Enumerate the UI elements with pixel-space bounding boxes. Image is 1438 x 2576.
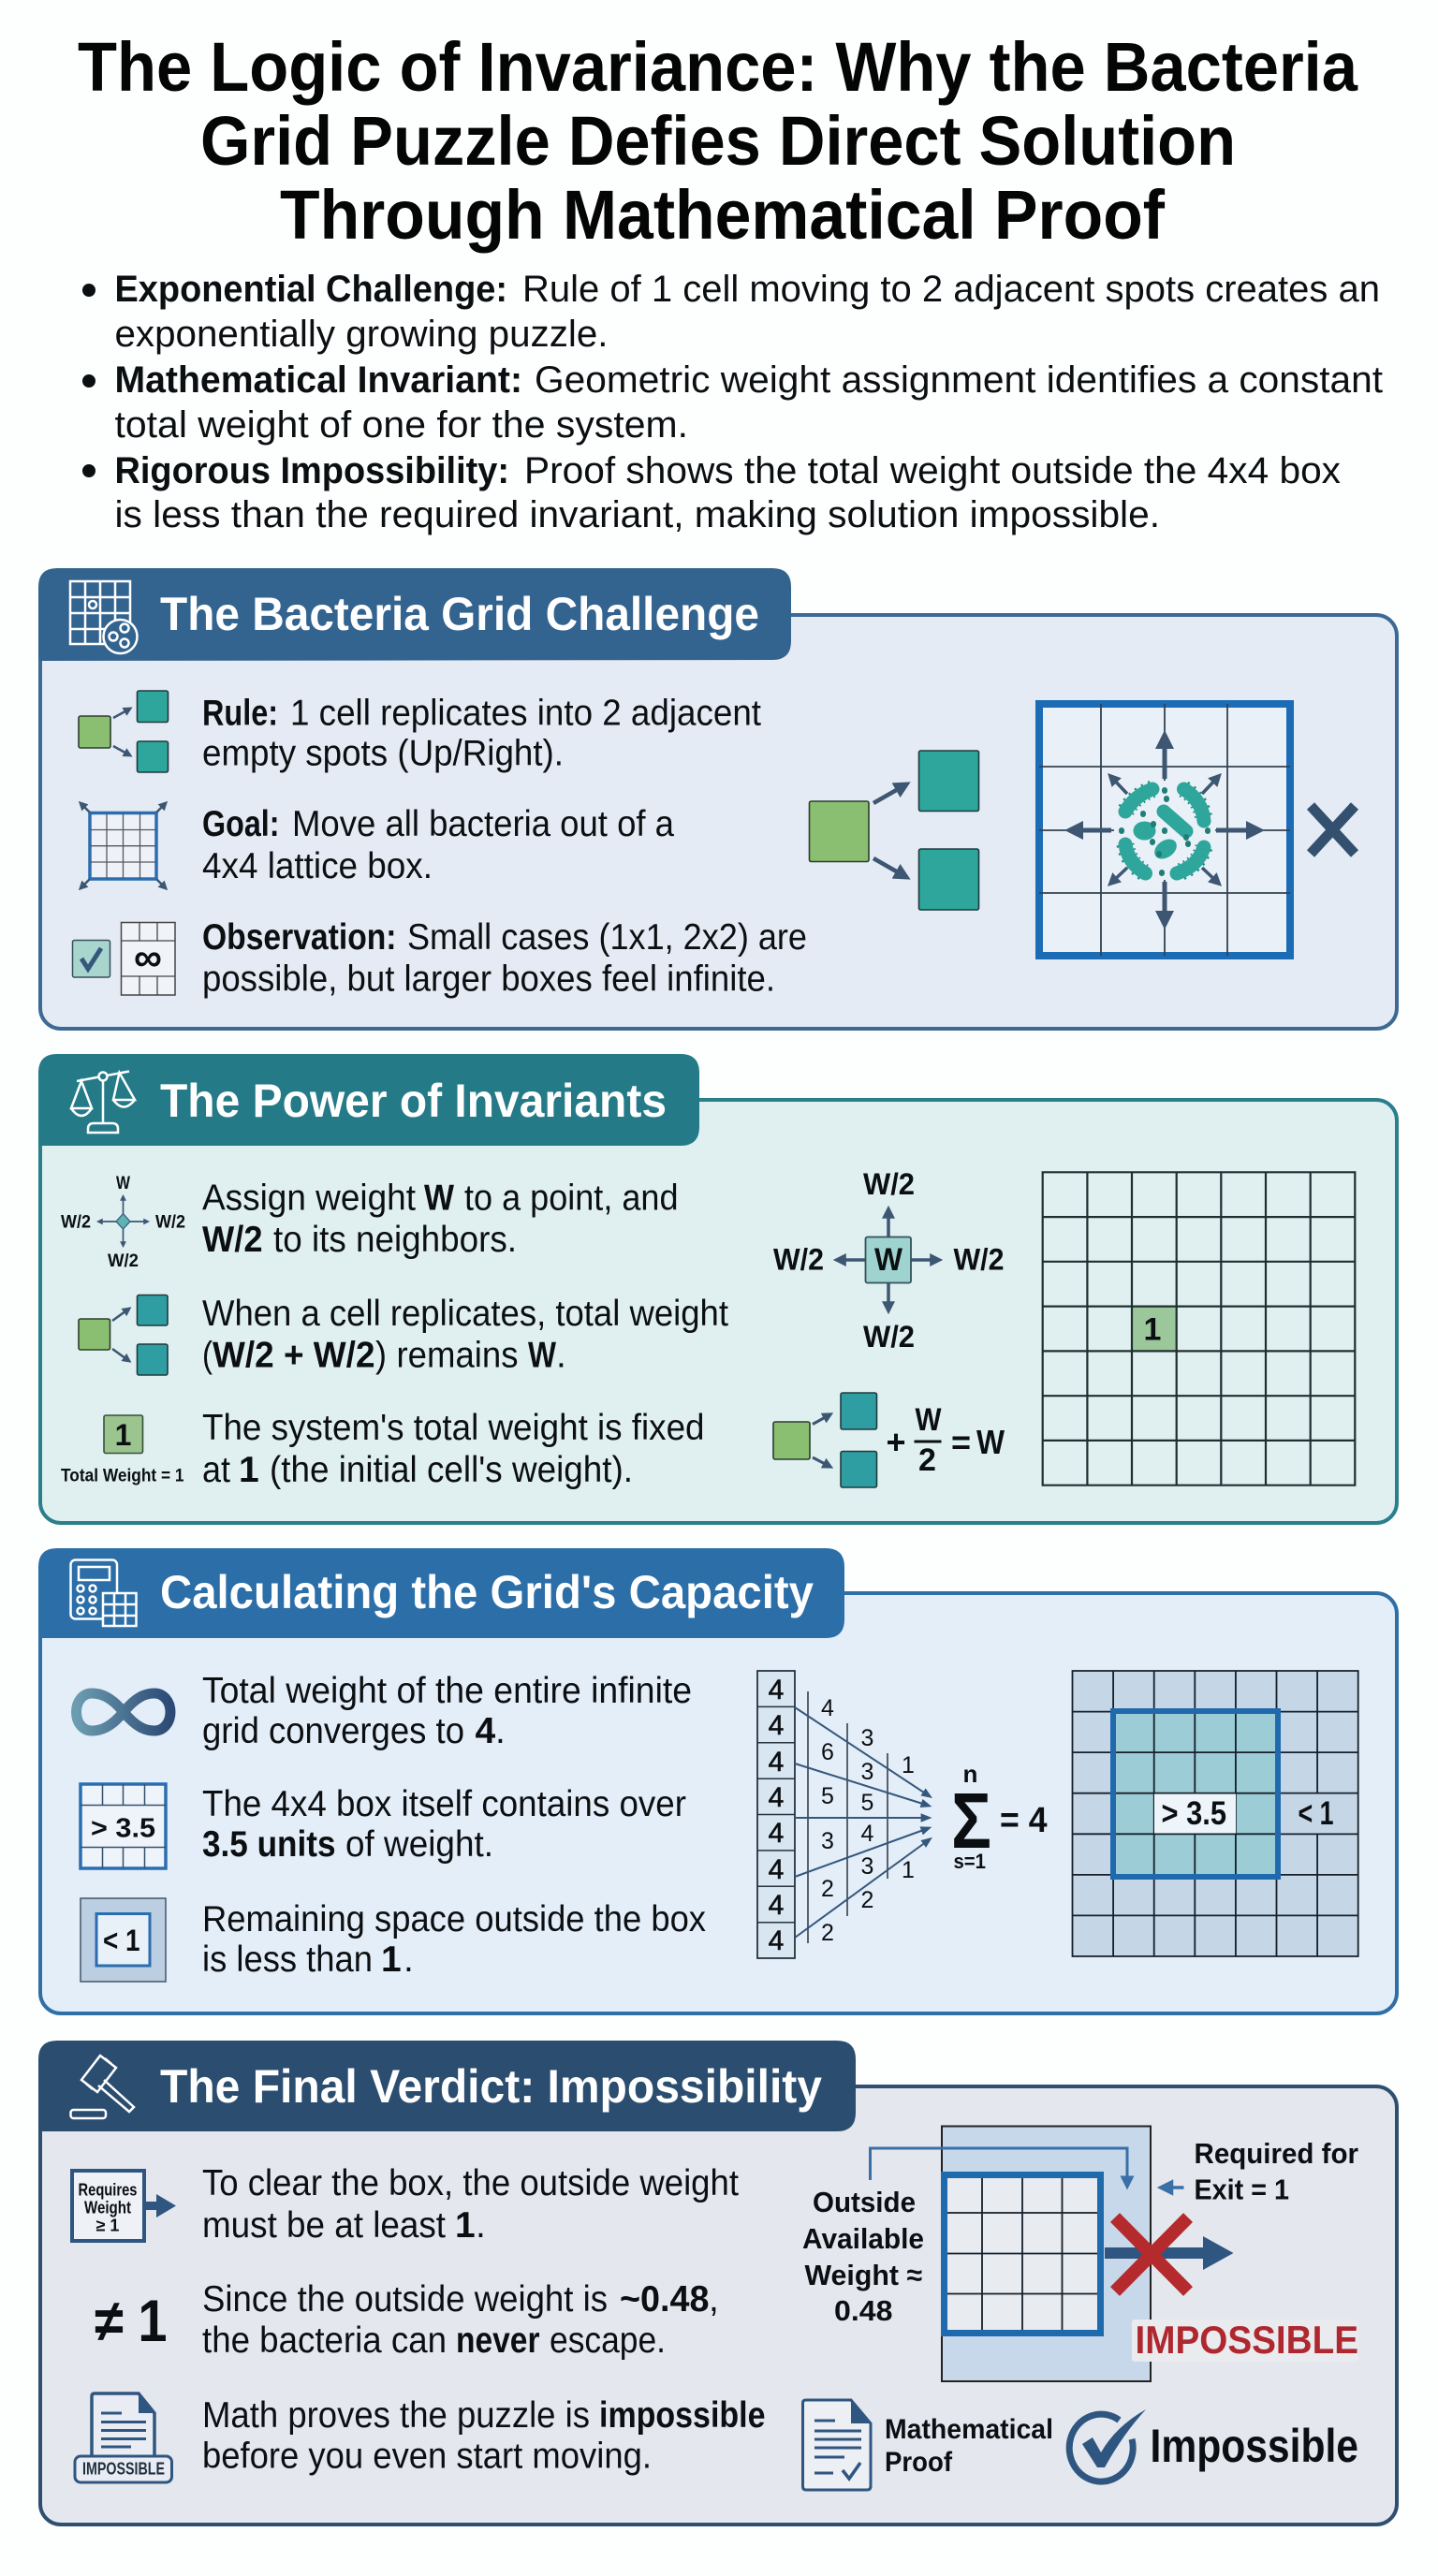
icon: box greater than 3.5 [81, 1784, 166, 1868]
diagram: convergence to 4: 4 [769, 1782, 784, 1813]
diagram: convergence to 4: 3 [861, 1759, 873, 1785]
diagram: convergence to 4: 4 [769, 1747, 784, 1778]
text: replication: W [528, 1335, 556, 1376]
text: observation [202, 917, 807, 1000]
text: box contents: The 4x4 box itself contains over [202, 1784, 686, 1824]
heading: The Final Verdict: Impossibility [160, 2060, 822, 2113]
heading: The Bacteria Grid Challenge [160, 588, 759, 640]
text: replication: When a cell replicates, total weight [202, 1294, 728, 1334]
text: outside weight: Since the outside weight is [202, 2279, 608, 2320]
text: requirement: To clear the box, the outside weight [202, 2163, 739, 2203]
summary bullets: Geometric weight assignment identifies a constant [535, 359, 1383, 401]
panel: the bacteria grid challenge [38, 568, 1397, 1029]
diagram: capacity grid [1073, 1671, 1358, 1956]
diagram: weight grid [1043, 1172, 1355, 1486]
diagram: convergence to 4: 2 [821, 1876, 834, 1902]
diagram: convergence to 4: 2 [861, 1887, 873, 1913]
diagram: convergence to 4: 3 [861, 1725, 873, 1751]
diagram: convergence to 4: 4 [769, 1854, 784, 1885]
text: assign weight: W [424, 1178, 454, 1219]
diagram: cell replicating [809, 751, 979, 910]
heading: The Power of Invariants [160, 1075, 667, 1127]
text: total weight: grid converges to [202, 1711, 464, 1751]
icon: cell replicating [79, 1295, 168, 1375]
icon: large cross [1311, 806, 1355, 854]
label: required for exit: Exit = 1 [1195, 2174, 1289, 2205]
summary bullets: Mathematical Invariant: [114, 359, 522, 401]
text: remaining space: is less than [202, 1939, 373, 1980]
label: outside available weight [802, 2186, 924, 2327]
diagram: bacteria in 4x4 box [1039, 704, 1290, 956]
icon: impossible document: IMPOSSIBLE [82, 2460, 165, 2479]
sum equals 4 [951, 1760, 1047, 1873]
diagram: convergence to 4: 3 [821, 1828, 834, 1854]
text: fixed total: at [202, 1450, 230, 1490]
diagram: convergence to 4: 2 [821, 1920, 834, 1946]
title [78, 28, 1358, 254]
heading: Calculating the Grid's Capacity [160, 1566, 814, 1618]
diagram: W with neighbours: W/2 [863, 1167, 915, 1201]
header tab: calculating the grid's capacity [38, 1548, 844, 1638]
text: remaining space [202, 1899, 706, 1980]
text: outside weight: ~0.48 [620, 2279, 710, 2320]
sum equals 4: s=1 [953, 1850, 986, 1873]
diagram: outside weight versus required [802, 2127, 1358, 2381]
icon: check circle [1069, 2409, 1146, 2481]
label: required for exit [1195, 2137, 1358, 2205]
text: box contents [202, 1784, 686, 1865]
panel: calculating the grid's capacity [38, 1548, 1397, 2013]
text: rule: empty spots (Up/Right). [202, 734, 564, 773]
text: fixed total: 1 [239, 1450, 259, 1490]
text: goal [202, 804, 674, 886]
text: requirement [202, 2163, 739, 2246]
text: requirement: 1 [455, 2205, 476, 2246]
text: observation: Observation: [202, 917, 397, 958]
title: The Logic of Invariance: Why the Bacteria [78, 28, 1358, 106]
icon: balance scale [71, 1071, 135, 1133]
text: total weight: 4 [476, 1711, 496, 1751]
text: outside weight: escape. [550, 2320, 666, 2361]
icon: gavel [71, 2056, 134, 2118]
diagram: replication equation: = [951, 1423, 971, 1461]
header tab: the final verdict [38, 2041, 856, 2131]
icon: proof document [803, 2400, 871, 2490]
sum equals 4: = 4 [1000, 1801, 1047, 1840]
text: rule: Rule: [202, 693, 278, 734]
diagram: convergence to 4: 5 [821, 1783, 834, 1809]
text: goal: Goal: [202, 804, 279, 844]
text: assign weight [202, 1178, 678, 1260]
text: replication: remains [397, 1335, 519, 1376]
diagram: convergence to 4: 4 [861, 1821, 874, 1847]
summary bullets: Proof shows the total weight outside the 4x4 box [524, 450, 1341, 491]
text: total weight: . [495, 1711, 506, 1751]
text: conclusion: Math proves the puzzle is [202, 2395, 590, 2436]
diagram: convergence to 4: 1 [902, 1752, 915, 1778]
diagram: convergence to 4: 5 [861, 1790, 873, 1816]
summary bullets: total weight of one for the system. [114, 404, 688, 446]
icon: requires weight box: ≥ 1 [96, 2217, 119, 2235]
diagram: W with neighbours: W/2 [863, 1320, 915, 1354]
label: mathematical proof: Mathematical [885, 2414, 1053, 2445]
text: conclusion: before you even start moving. [202, 2436, 652, 2477]
diagram: convergence to 4 [757, 1671, 1047, 1958]
panel: the final verdict [38, 2041, 1397, 2525]
sum equals 4: n [963, 1760, 977, 1788]
diagram: weight grid: 1 [1144, 1312, 1161, 1348]
text: remaining space: 1 [381, 1939, 402, 1980]
diagram: capacity grid: < 1 [1298, 1795, 1333, 1832]
text: total weight [202, 1671, 692, 1751]
label: outside available weight: Available [802, 2222, 924, 2255]
diagram: convergence to 4: 4 [769, 1818, 784, 1849]
diagram: convergence to 4: 4 [769, 1890, 784, 1921]
diagram: replication equation [773, 1393, 1005, 1487]
icon: weight compass: W [116, 1174, 130, 1193]
summary bullets: Exponential Challenge: [114, 269, 507, 310]
text: requirement: . [476, 2205, 486, 2246]
text: requirement: must be at least [202, 2205, 446, 2246]
text: remaining space: Remaining space outside the box [202, 1899, 706, 1939]
text: replication [202, 1294, 728, 1376]
icon: weight compass [61, 1174, 185, 1271]
text: replication: W/2 + W/2 [213, 1335, 374, 1376]
icon: cell replicating [79, 691, 169, 772]
text: observation: possible, but larger boxes feel infinite. [202, 959, 775, 1000]
summary bullets: Rigorous Impossibility: [114, 450, 509, 491]
diagram: replication equation: W [916, 1402, 942, 1438]
icon: requires weight box: Weight [84, 2198, 131, 2217]
label: outside available weight: Weight ≈ [805, 2259, 922, 2291]
icon: total weight equals one: Total Weight = 1 [61, 1466, 184, 1486]
text: fixed total [202, 1408, 704, 1490]
label: outside available weight: 0.48 [834, 2294, 893, 2327]
label: mathematical proof [885, 2414, 1053, 2478]
text: conclusion: impossible [599, 2395, 766, 2436]
diagram: convergence to 4: 4 [821, 1695, 834, 1721]
sum equals 4: Σ [951, 1777, 991, 1865]
header tab: the bacteria grid challenge [38, 568, 791, 661]
diagram: replication equation: 2 [918, 1442, 936, 1478]
label: impossible verdict: Impossible [1150, 2420, 1358, 2472]
text: replication: ( [202, 1335, 213, 1376]
icon: calculator and grid [71, 1559, 137, 1626]
title: Grid Puzzle Defies Direct Solution [200, 102, 1236, 180]
diagram: convergence to 4: 4 [769, 1925, 784, 1956]
icon: box greater than 3.5: > 3.5 [91, 1814, 155, 1844]
icon: total weight equals one: 1 [115, 1418, 131, 1452]
text: box contents: of weight. [345, 1824, 493, 1865]
diagram: W with neighbours [773, 1167, 1004, 1354]
arrow: outside weight callout [871, 2148, 1127, 2186]
label: required for exit: Required for [1195, 2137, 1358, 2170]
icon: infinity [77, 1693, 170, 1731]
summary bullets [82, 269, 1383, 535]
text: outside weight: never [456, 2320, 539, 2361]
icon: outside less than 1 [81, 1898, 166, 1982]
icon: not equal to one: ≠ 1 [95, 2289, 167, 2354]
summary bullets: exponentially growing puzzle. [114, 314, 609, 355]
icon: grid with petri dish [70, 581, 137, 653]
icon: requires weight box [72, 2171, 176, 2241]
text: goal: 4x4 lattice box. [202, 846, 433, 886]
text: fixed total: The system's total weight is fixed [202, 1408, 704, 1448]
diagram: W with neighbours: W/2 [773, 1243, 824, 1277]
text: outside weight: , [709, 2279, 719, 2320]
text: replication: ) [375, 1335, 387, 1376]
text: conclusion [202, 2395, 766, 2477]
diagram: convergence to 4: 4 [769, 1675, 784, 1705]
icon: check and infinity grid: ∞ [134, 935, 162, 979]
text: goal: Move all bacteria out of a [292, 804, 674, 844]
text: rule: 1 cell replicates into 2 adjacent [290, 693, 761, 734]
text: replication: . [556, 1335, 566, 1376]
icon: impossible document [75, 2393, 172, 2482]
icon: weight compass: W/2 [155, 1213, 185, 1232]
icon: bacteria cluster [1122, 789, 1208, 873]
text: box contents: 3.5 units [202, 1824, 335, 1865]
icon: check and infinity grid [73, 923, 175, 995]
diagram: convergence to 4: 3 [861, 1853, 873, 1880]
icon: requires weight box: Requires [79, 2181, 137, 2200]
diagram: convergence to 4: 4 [769, 1710, 784, 1741]
text: observation: Small cases (1x1, 2x2) are [407, 917, 807, 958]
header tab: the power of invariants [38, 1054, 699, 1146]
text: rule [202, 693, 761, 773]
text: assign weight: to a point, and [464, 1178, 678, 1219]
icon: outside less than 1: < 1 [103, 1924, 140, 1957]
diagram: capacity grid: > 3.5 [1161, 1795, 1226, 1832]
text: assign weight: Assign weight [202, 1178, 416, 1219]
text: assign weight: to its neighbors. [273, 1220, 517, 1260]
text: outside weight: the bacteria can [202, 2320, 447, 2361]
icon: total weight equals one [61, 1415, 184, 1486]
summary bullets: Rule of 1 cell moving to 2 adjacent spots creates an [522, 269, 1380, 310]
label: outside available weight: Outside [813, 2186, 916, 2218]
icon: red cross [1115, 2217, 1188, 2291]
text: outside weight [202, 2279, 719, 2361]
arrow: blocked exit [1105, 2236, 1234, 2270]
title: Through Mathematical Proof [280, 176, 1165, 254]
summary bullets: is less than the required invariant, making solution impossible. [114, 494, 1160, 535]
text: fixed total: (the initial cell's weight). [270, 1450, 633, 1490]
diagram: convergence to 4: 1 [902, 1857, 915, 1883]
text: remaining space: . [404, 1939, 414, 1980]
text: assign weight: W/2 [202, 1220, 262, 1260]
diagram: convergence to 4: 6 [821, 1739, 834, 1765]
diagram: replication equation: W [976, 1423, 1005, 1461]
diagram: W with neighbours: W/2 [953, 1243, 1004, 1277]
text: total weight: Total weight of the entire infinite [202, 1671, 692, 1711]
panel: the power of invariants [38, 1054, 1397, 1523]
icon: weight compass: W/2 [61, 1213, 91, 1232]
label: mathematical proof: Proof [885, 2447, 953, 2478]
diagram: W with neighbours: W [874, 1242, 903, 1278]
icon: lattice box with outward arrows [81, 803, 166, 888]
arrow: required pointer [1162, 2186, 1183, 2189]
label: impossible: IMPOSSIBLE [1135, 2318, 1358, 2362]
icon: weight compass: W/2 [108, 1251, 139, 1271]
diagram: replication equation: + [886, 1423, 906, 1461]
